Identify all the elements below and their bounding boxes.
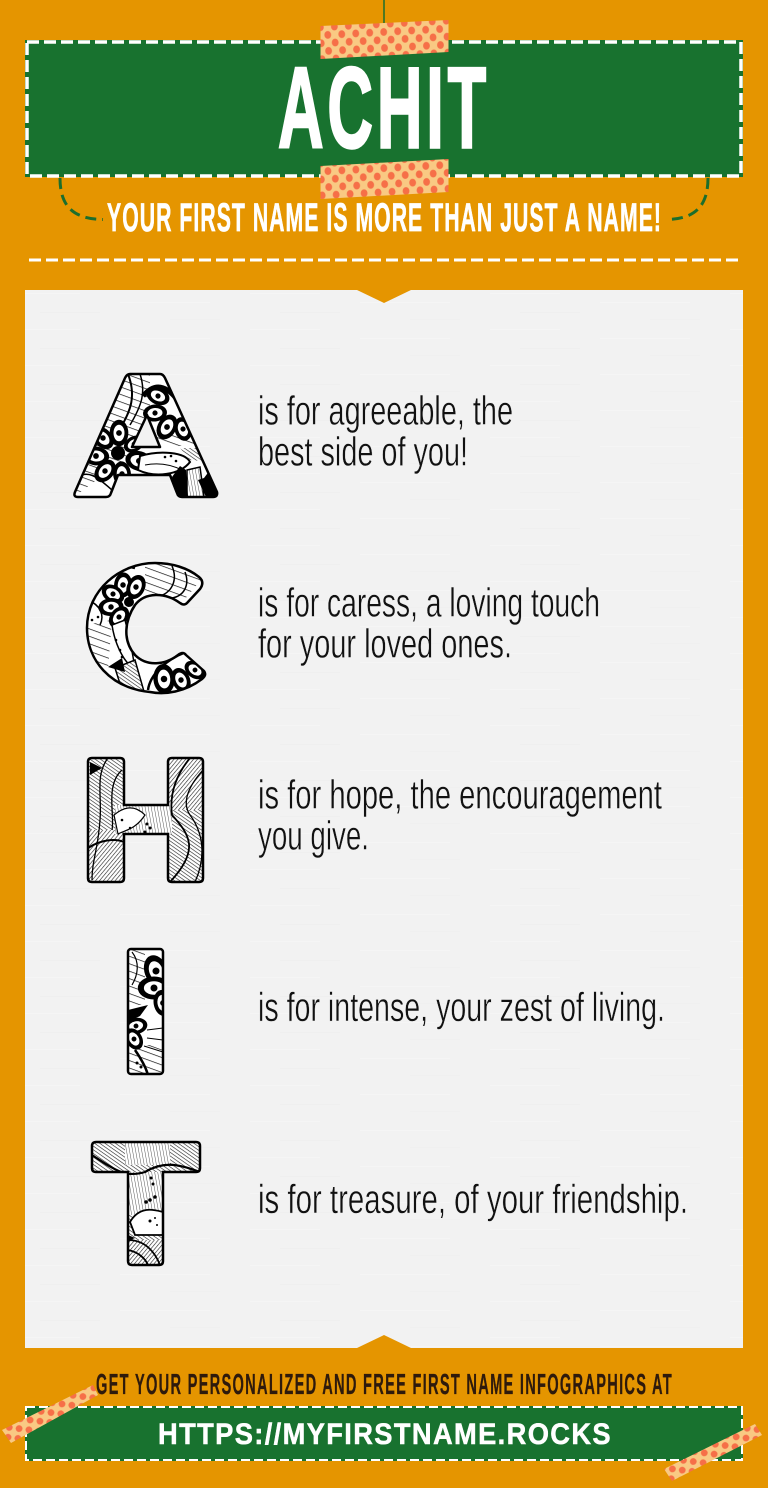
text: H [258,772,662,858]
text: H: you give. [258,812,369,858]
dashed divider [29,258,739,262]
left dashed bracket [60,178,103,220]
panel: letters [25,290,743,1348]
text: A: is for agreeable, the [258,388,513,434]
footer banner [25,1406,743,1461]
letter H [85,755,207,885]
text: C: for your loved ones. [258,620,512,666]
text: A: best side of you! [258,428,468,474]
title banner [25,40,743,177]
letter C [85,560,210,695]
tape: top [320,20,448,59]
letter A [70,370,220,500]
right dashed bracket [667,178,708,220]
text: A [258,388,513,474]
hanging string [383,0,385,24]
text: C [258,580,600,666]
tape: footer left [2,1385,98,1443]
tape: bottom [320,159,448,199]
tape: footer right [664,1424,762,1481]
footer url: HTTPS://MYFIRSTNAME.ROCKS [158,1418,612,1451]
text: C: is for caress, a loving touch [258,580,600,626]
letter I [126,948,164,1076]
title: ACHIT [278,44,490,172]
letter T [90,1140,202,1268]
